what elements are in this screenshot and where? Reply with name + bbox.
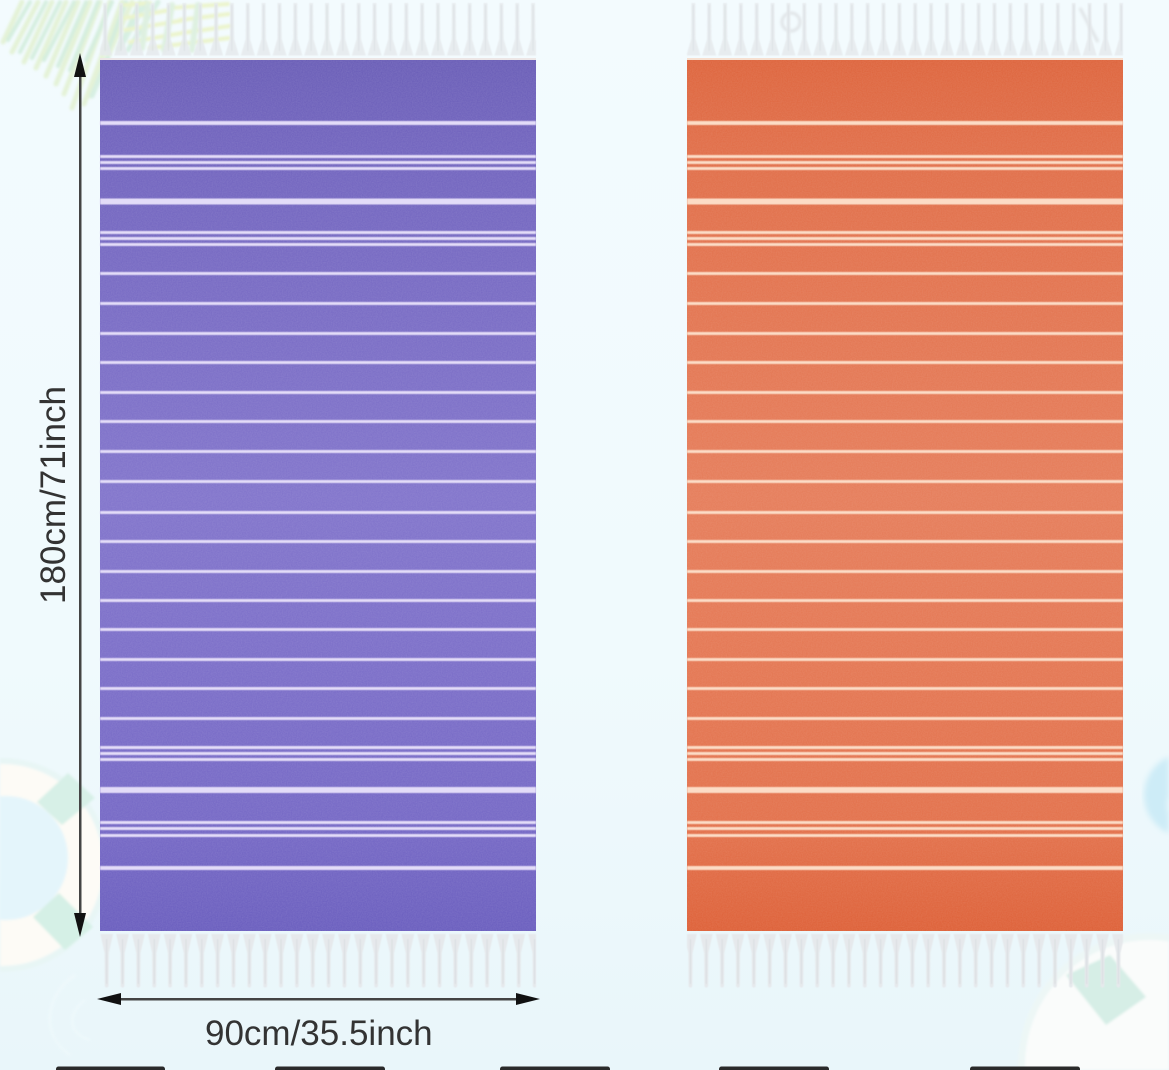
- top fringe: [100, 0, 536, 60]
- teal band lower: [33, 893, 93, 950]
- towel body: [687, 60, 1123, 931]
- height label: 180cm/71inch: [34, 386, 73, 604]
- teal band upper: [37, 773, 95, 825]
- blue ball at right edge: [1144, 757, 1169, 833]
- bottom fringe: [100, 931, 536, 991]
- faint grey marks behind top fringes: [782, 8, 1098, 42]
- lifebuoy right: [1018, 933, 1169, 1070]
- white stripes: [100, 121, 536, 870]
- water ripple: [50, 975, 90, 1055]
- palm leaf decoration: [3, 2, 230, 108]
- towel top edge: [100, 58, 536, 60]
- purple towel: [100, 0, 536, 991]
- cropped bottom tabs: [56, 1066, 1080, 1070]
- teal band: [1066, 955, 1146, 1025]
- towel body: [100, 60, 536, 931]
- orange towel: [687, 0, 1123, 991]
- towel top edge: [687, 58, 1123, 60]
- height arrow: [74, 53, 86, 937]
- lifebuoy left: [0, 758, 109, 972]
- cream stripes: [687, 121, 1123, 870]
- top fringe: [687, 0, 1123, 60]
- bottom fringe: [687, 931, 1123, 991]
- width arrow: [97, 993, 540, 1005]
- width label: 90cm/35.5inch: [205, 1014, 433, 1053]
